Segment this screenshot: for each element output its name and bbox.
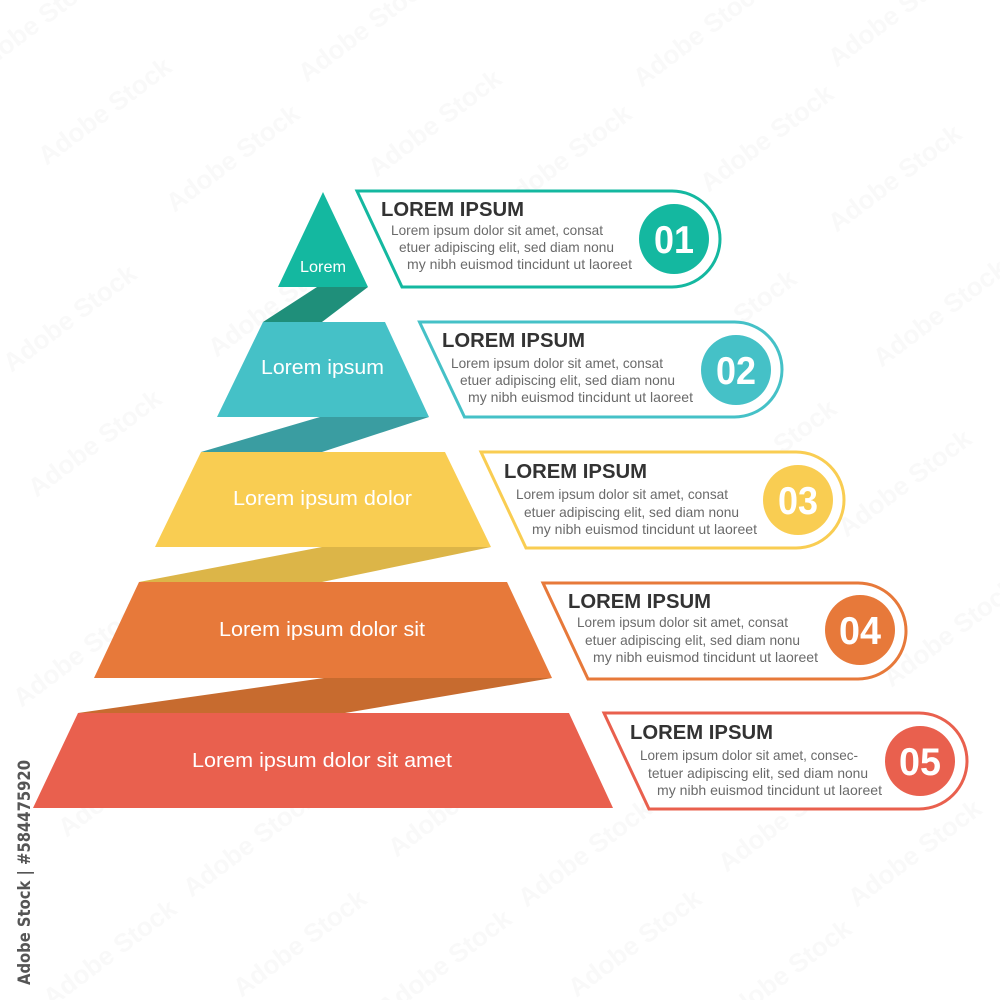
tier 5: red trapezoid: Lorem ipsum dolor sit amet	[192, 750, 452, 772]
text: Adobe Stock	[697, 393, 842, 513]
callout card 02	[420, 322, 782, 417]
text: Adobe Stock	[160, 98, 305, 218]
tier 2: aqua trapezoid: Lorem ipsum	[261, 357, 384, 379]
number badge 03	[763, 465, 833, 535]
text: Adobe Stock	[32, 51, 177, 171]
number badge 05: 05	[899, 741, 941, 784]
body text 02: my nibh euismod tincidunt ut laoreet	[468, 389, 693, 405]
body text 03: etuer adipiscing elit, sed diam nonu	[524, 504, 739, 520]
body text 04: etuer adipiscing elit, sed diam nonu	[585, 632, 800, 648]
text: Adobe Stock	[694, 78, 839, 198]
body text 01: etuer adipiscing elit, sed diam nonu	[399, 239, 614, 255]
text: Adobe Stock	[52, 723, 197, 843]
heading 05: LOREM IPSUM	[630, 721, 773, 744]
body text 05: my nibh euismod tincidunt ut laoreet	[657, 782, 882, 798]
text: Adobe Stock	[842, 793, 987, 913]
body text 04: my nibh euismod tincidunt ut laoreet	[593, 649, 818, 665]
body text 03: Lorem ipsum dolor sit amet, consat	[516, 486, 728, 502]
tier 3: yellow trapezoid: Lorem ipsum dolor	[233, 488, 412, 510]
pyramid	[33, 192, 613, 808]
body text 02: Lorem ipsum dolor sit amet, consat	[451, 355, 663, 371]
heading 02: LOREM IPSUM	[442, 329, 585, 352]
fold: yellow to orange	[139, 547, 491, 582]
text: Adobe Stock	[22, 383, 167, 503]
tier 4: orange trapezoid: Lorem ipsum dolor sit	[219, 619, 425, 641]
text: Adobe Stock	[562, 883, 707, 1000]
callout card 05	[604, 713, 967, 809]
body text 05	[640, 747, 882, 798]
text: Adobe Stock	[362, 63, 507, 183]
number badge 04: 04	[839, 610, 881, 653]
body text 05: Lorem ipsum dolor sit amet, consec-	[640, 747, 858, 763]
text: Adobe Stock	[227, 883, 372, 1000]
tier 3: yellow trapezoid	[155, 452, 491, 547]
fold: teal to aqua	[263, 287, 368, 322]
number badge 01	[639, 204, 709, 274]
body text 04	[577, 614, 818, 665]
text: Adobe Stock	[712, 758, 857, 878]
text: Adobe Stock	[832, 423, 977, 543]
text: Adobe Stock	[177, 783, 322, 903]
number badge 05	[885, 726, 955, 796]
body text 01: Lorem ipsum dolor sit amet, consat	[391, 222, 603, 238]
body text 02	[451, 355, 693, 405]
text: Adobe Stock	[822, 118, 967, 238]
body text 03: my nibh euismod tincidunt ut laoreet	[532, 521, 757, 537]
body text 02: etuer adipiscing elit, sed diam nonu	[460, 372, 675, 388]
text: Adobe Stock	[0, 258, 142, 378]
fold: aqua to yellow	[201, 417, 429, 452]
tier 2: aqua trapezoid	[217, 322, 429, 417]
tier 1: triangle: Lorem	[300, 259, 346, 276]
number badge 02: 02	[716, 350, 756, 393]
tier 1: triangle	[278, 192, 368, 287]
heading 04: LOREM IPSUM	[568, 590, 711, 613]
heading 01: LOREM IPSUM	[381, 198, 524, 221]
body text 04: Lorem ipsum dolor sit amet, consat	[577, 614, 788, 630]
callout card 03	[481, 452, 844, 548]
text: Adobe Stock	[382, 743, 527, 863]
number badge 04	[825, 595, 895, 665]
number badge 01: 01	[654, 219, 694, 262]
number badge 03: 03	[778, 480, 818, 523]
callout card 01	[357, 191, 720, 287]
heading 03: LOREM IPSUM	[504, 460, 647, 483]
tier 4: orange trapezoid	[94, 582, 552, 678]
tier 5: red trapezoid	[33, 713, 613, 808]
number badge 02	[701, 335, 771, 405]
body text 01: my nibh euismod tincidunt ut laoreet	[407, 256, 632, 272]
fold: orange to red	[78, 678, 552, 713]
callout card 04	[543, 583, 906, 679]
text: Adobe Stock	[657, 263, 802, 383]
body text 01	[391, 222, 632, 272]
body text 05: tetuer adipiscing elit, sed diam nonu	[648, 765, 868, 781]
body text 03	[516, 486, 757, 537]
text: Adobe Stock	[512, 793, 657, 913]
text: Adobe Stock	[492, 98, 637, 218]
text: Adobe Stock	[7, 593, 152, 713]
stock credit label: Adobe Stock | #584475920	[15, 760, 35, 985]
text: Adobe Stock	[202, 243, 347, 363]
